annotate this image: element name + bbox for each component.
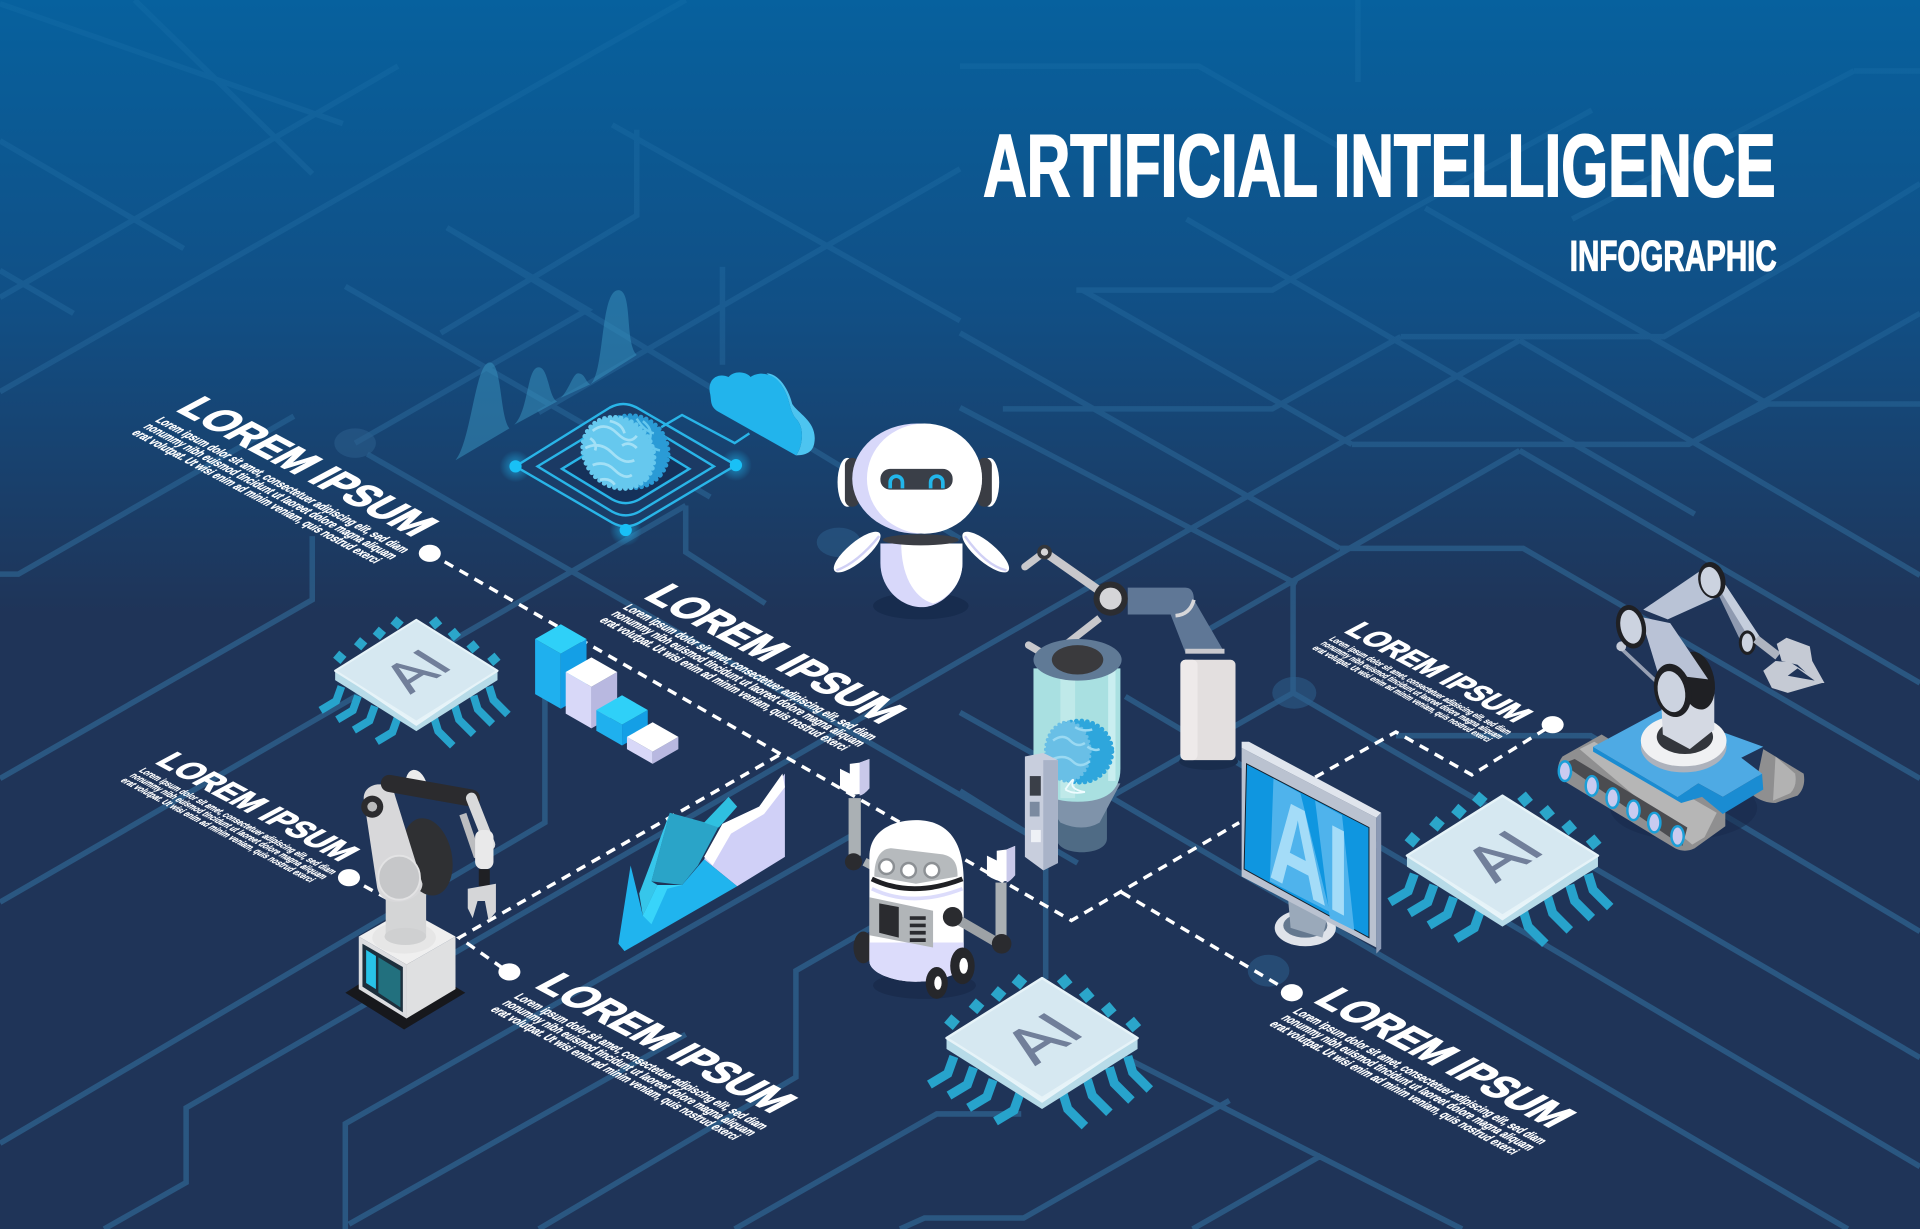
icon: brain on circuit platform (500, 401, 752, 546)
icon: glass tank with brain (1033, 639, 1122, 852)
text block: center: nonummy nibh euismod tincidunt ut laoreet dolore magna aliquam (608, 608, 870, 748)
text block: bottom left: nonummy nibh euismod tincidunt ut laoreet dolore magna aliquam (499, 998, 761, 1138)
text block: right: LOREM IPSUM (1337, 618, 1540, 726)
icon: tracked robot arm (1558, 559, 1824, 851)
faint peak chart (456, 290, 637, 460)
text block: top left: erat volutpat. Ut wisi enim ad minim veniam, quis nostrud exerci (128, 428, 386, 565)
icon: wheeled robot (840, 759, 1015, 999)
text block: bottom right: LOREM IPSUM (1304, 982, 1587, 1133)
icon: isometric area chart (618, 774, 785, 951)
dashed connector lines (349, 553, 1553, 993)
text block: top left: LOREM IPSUM (166, 391, 449, 542)
chip: upper left: AI (370, 642, 464, 701)
chip: bottom: AI (986, 1003, 1098, 1073)
text block: top left: nonummy nibh euismod tincidunt ut laoreet dolore magna aliquam (140, 421, 402, 561)
text block: left: Lorem ipsum dolor sit amet, consectetuer adipiscing elit, sed diam (136, 767, 340, 876)
icon: computer monitor with AI (1242, 742, 1381, 954)
icon: cloud (709, 372, 815, 455)
chip: upper left (321, 620, 508, 746)
chip: right (1390, 796, 1610, 944)
icon: isometric bar chart (535, 624, 678, 764)
text block: top left: Lorem ipsum dolor sit amet, consectetuer adipiscing elit, sed diam (152, 415, 414, 555)
text block: left: erat volutpat. Ut wisi enim ad minim veniam, quis nostrud exerci (117, 777, 318, 884)
text block: bottom right: erat volutpat. Ut wisi enim ad minim veniam, quis nostrud exerci (1266, 1019, 1523, 1156)
icon: computer monitor with AI: AI (1269, 766, 1349, 945)
text block: center: LOREM IPSUM (634, 578, 917, 729)
text block: left: nonummy nibh euismod tincidunt ut laoreet dolore magna aliquam (126, 772, 330, 881)
text block: right: Lorem ipsum dolor sit amet, consectetuer adipiscing elit, sed diam (1326, 636, 1514, 736)
text block: right: erat volutpat. Ut wisi enim ad minim veniam, quis nostrud exerci (1309, 645, 1494, 744)
text block: left: LOREM IPSUM (147, 748, 367, 866)
icon: robotic arm holding tank (1025, 545, 1238, 770)
text block: center: Lorem ipsum dolor sit amet, consectetuer adipiscing elit, sed diam (620, 602, 882, 742)
text block: bottom right: nonummy nibh euismod tincidunt ut laoreet dolore magna aliquam (1278, 1012, 1540, 1152)
text block: center: erat volutpat. Ut wisi enim ad minim veniam, quis nostrud exerci (596, 615, 854, 752)
chip: bottom (929, 978, 1150, 1126)
chip: right: AI (1446, 821, 1559, 891)
subtitle: INFOGRAPHIC (1570, 233, 1777, 281)
icon: industrial robot arm on base (345, 770, 496, 1029)
text block: bottom right: Lorem ipsum dolor sit amet, consectetuer adipiscing elit, sed diam (1290, 1006, 1551, 1146)
text block: right: nonummy nibh euismod tincidunt ut laoreet dolore magna aliquam (1317, 640, 1506, 741)
text block: bottom left: Lorem ipsum dolor sit amet, consectetuer adipiscing elit, sed diam (511, 991, 773, 1131)
text block: bottom left: erat volutpat. Ut wisi enim ad minim veniam, quis nostrud exerci (487, 1004, 745, 1142)
icon: hovering white robot (828, 424, 1015, 619)
text block: bottom left: LOREM IPSUM (525, 967, 808, 1118)
connector end dots (338, 545, 1564, 1001)
icon: control panel beside tank (1025, 753, 1058, 870)
